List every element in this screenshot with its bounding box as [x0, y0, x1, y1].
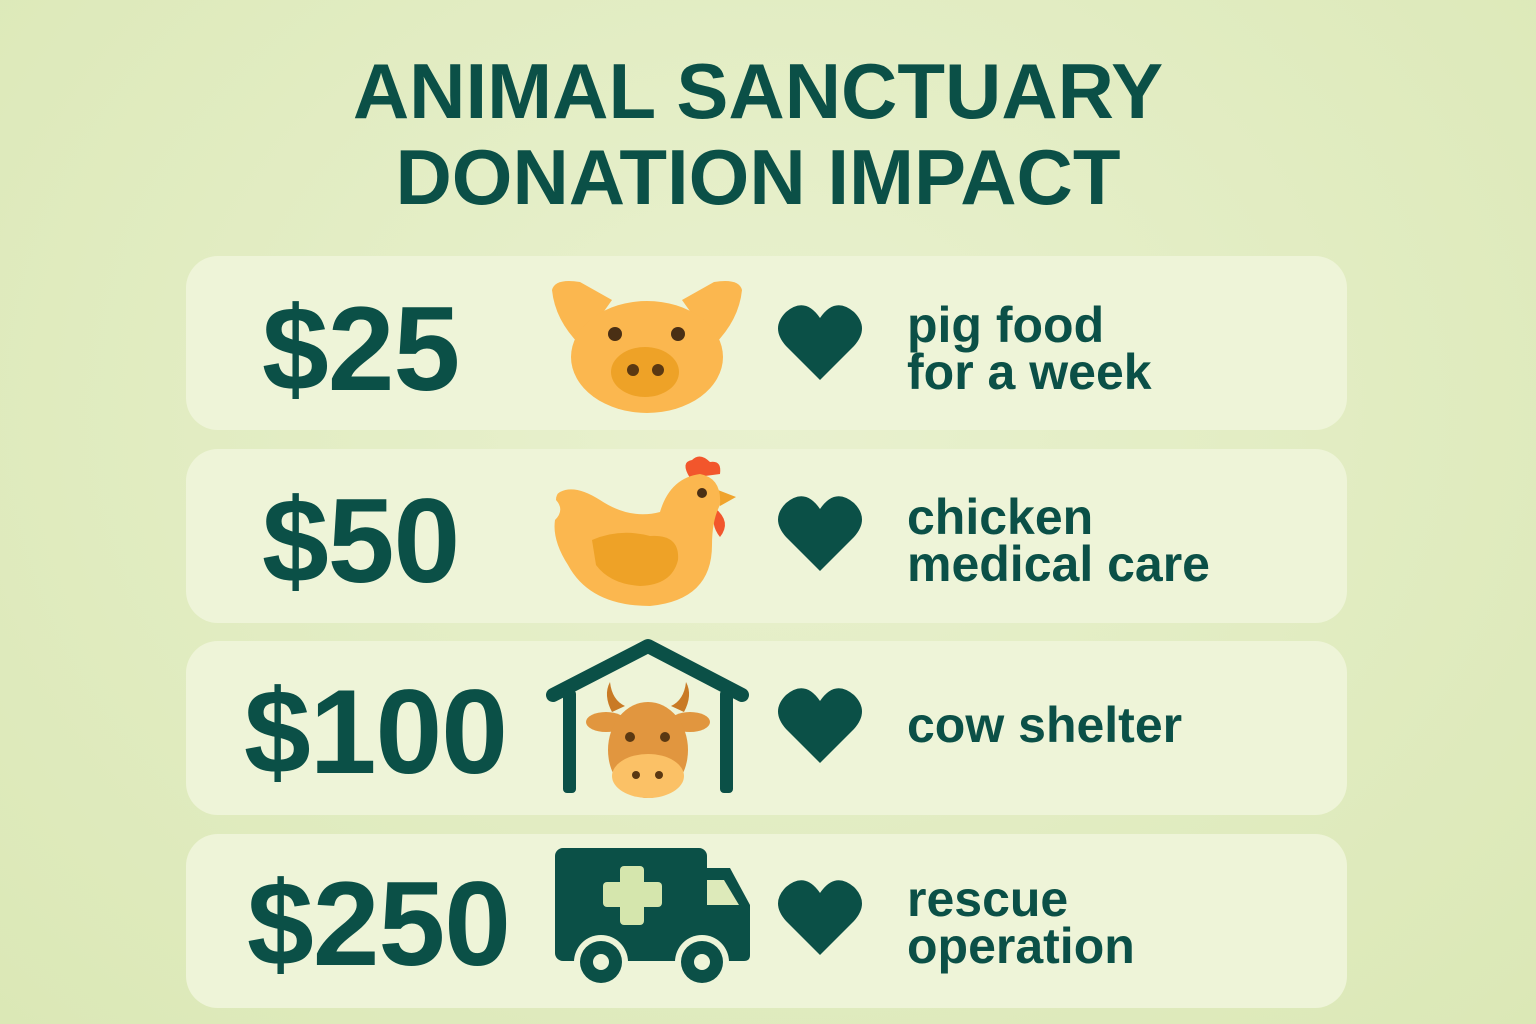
text: chicken	[907, 489, 1210, 592]
icon: chicken	[555, 456, 736, 606]
text: chicken: chicken	[907, 489, 1093, 545]
text: cow shelter: cow shelter	[907, 697, 1182, 753]
price $250: $250	[247, 857, 510, 991]
icon: heart 1	[778, 305, 862, 380]
icon: heart 4	[778, 880, 862, 955]
title	[353, 47, 1163, 221]
panel: $100	[186, 641, 1347, 815]
icon: heart 2	[778, 496, 862, 571]
text: rescue	[907, 871, 1135, 974]
panel: $50	[186, 449, 1347, 623]
icon: ambulance	[555, 848, 750, 989]
icon: heart 3	[778, 688, 862, 763]
price $100: $100	[244, 665, 507, 799]
text: rescue: operation	[907, 918, 1135, 974]
icon: cow shelter	[553, 646, 742, 798]
text: pig food: pig food	[907, 297, 1104, 353]
title: ANIMAL SANCTUARY	[353, 47, 1163, 135]
price $50: $50	[262, 474, 459, 608]
text: pig food	[907, 297, 1152, 400]
panel: $250	[186, 834, 1347, 1008]
price $25: $25	[262, 282, 459, 416]
icon: pig	[552, 281, 742, 413]
title: DONATION IMPACT	[395, 133, 1121, 221]
panel: $25	[186, 256, 1347, 430]
text: rescue: rescue	[907, 871, 1068, 927]
text: chicken: medical care	[907, 536, 1210, 592]
text: pig food: for a week	[907, 344, 1152, 400]
